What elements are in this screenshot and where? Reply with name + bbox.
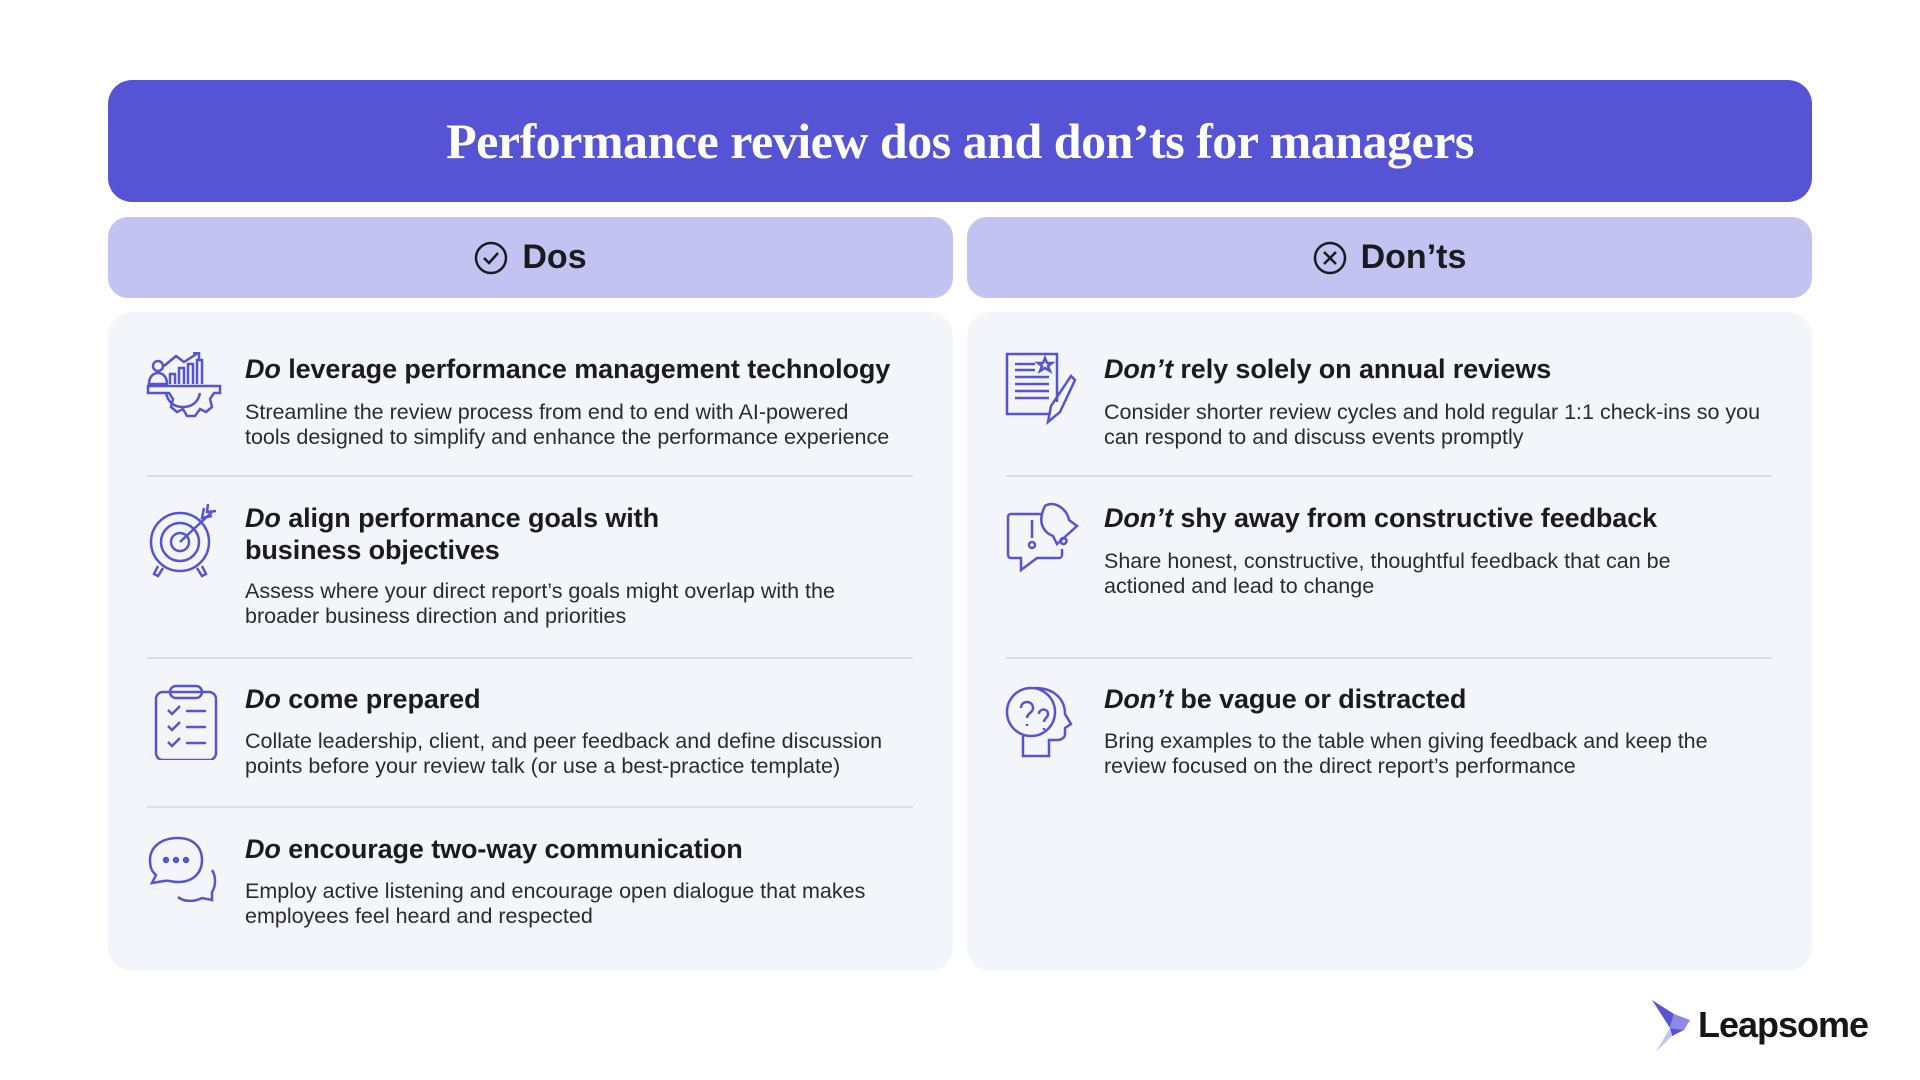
icon: document pencil <box>1006 352 1076 425</box>
item: do come prepared: points before your review talk (or use a best-practice template) <box>245 754 840 778</box>
header: donts <box>967 217 1812 298</box>
item: do leverage: Do leverage performance management technology <box>245 354 890 384</box>
item: do align: broader business direction and priorities <box>245 604 626 628</box>
icon: bird <box>1652 1000 1690 1052</box>
item: do align: Assess where your direct report’s goals might overlap with the <box>245 579 835 603</box>
header: dos: Dos <box>522 238 587 276</box>
item: do leverage: tools designed to simplify and enhance the performance experience <box>245 425 889 449</box>
icon: target <box>150 504 216 578</box>
item: dont shy <box>1104 503 1671 598</box>
item: do leverage: Streamline the review process from end to end with AI-powered <box>245 400 848 424</box>
icon: x circle <box>1314 242 1346 274</box>
item: dont rely <box>1104 354 1760 449</box>
item: do encourage: employees feel heard and respected <box>245 904 593 928</box>
title banner <box>108 80 1812 202</box>
header: dos <box>108 217 953 298</box>
title banner: Performance review dos and don’ts for managers <box>446 113 1474 169</box>
logo: leapsome <box>1652 1000 1868 1052</box>
item: dont rely: Don’t rely solely on annual reviews <box>1104 354 1551 384</box>
panel: dos <box>108 312 953 971</box>
icon: clipboard <box>154 684 218 760</box>
item: do align <box>245 503 835 628</box>
item: do encourage <box>245 834 865 928</box>
item: dont be vague: Don’t be vague or distracted <box>1104 684 1466 714</box>
panel: donts <box>967 312 1812 971</box>
item: dont rely: can respond to and discuss events promptly <box>1104 425 1523 449</box>
item: do encourage: Do encourage two-way communication <box>245 834 743 864</box>
item: do come prepared <box>245 684 882 778</box>
item: do align: business objectives <box>245 535 500 565</box>
icon: check circle <box>474 242 508 274</box>
item: dont be vague: Bring examples to the table when giving feedback and keep the <box>1104 729 1708 753</box>
item: dont shy: Share honest, constructive, thoughtful feedback that can be <box>1104 549 1671 573</box>
item: dont be vague: review focused on the direct report’s performance <box>1104 754 1576 778</box>
logo: leapsome: Leapsome <box>1698 1004 1868 1045</box>
item: do come prepared: Do come prepared <box>245 684 480 714</box>
icon: chart gear <box>146 352 222 418</box>
icon: bell speech <box>1006 502 1079 572</box>
item: dont rely: Consider shorter review cycles and hold regular 1:1 check-ins so you <box>1104 400 1760 424</box>
item: do come prepared: Collate leadership, client, and peer feedback and define discussion <box>245 729 882 753</box>
icon: head question <box>1006 686 1073 758</box>
item: dont shy: actioned and lead to change <box>1104 574 1374 598</box>
item: dont be vague <box>1104 684 1708 778</box>
item: dont shy: Don’t shy away from constructive feedback <box>1104 503 1657 533</box>
item: do leverage <box>245 354 890 449</box>
icon: chat bubbles <box>148 836 216 902</box>
item: do encourage: Employ active listening and encourage open dialogue that makes <box>245 879 865 903</box>
header: donts: Don’ts <box>1361 238 1466 276</box>
item: do align: Do align performance goals with <box>245 503 659 533</box>
